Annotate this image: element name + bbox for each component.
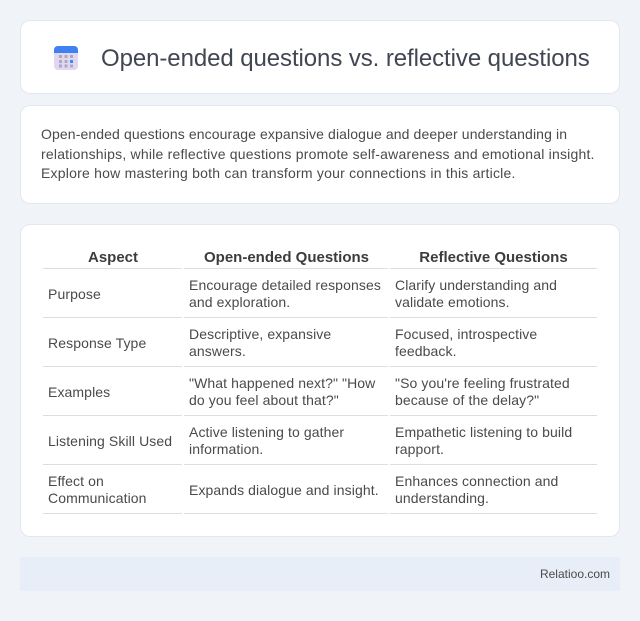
- row: effect on communication: Expands dialogue and insight.: [189, 482, 379, 498]
- row: purpose: Encourage detailed responses: [189, 277, 381, 293]
- intro text: Explore how mastering both can transform your connections in this article.: [41, 165, 516, 181]
- row: effect on communication: understanding.: [395, 490, 489, 506]
- row: response type: Response Type: [48, 335, 146, 351]
- row: listening skill: rapport.: [395, 441, 444, 457]
- row: listening skill: [43, 424, 597, 465]
- row: examples: because of the delay?": [395, 392, 539, 408]
- row: effect on communication: [43, 473, 597, 514]
- row: examples: [43, 375, 597, 416]
- title: Open-ended questions vs. reflective questions: [101, 45, 590, 72]
- header row: Aspect: [88, 249, 138, 266]
- row: response type: answers.: [189, 343, 246, 359]
- icon: calendar: [54, 46, 78, 70]
- row: examples: "So you're feeling frustrated: [395, 375, 570, 391]
- table: [43, 249, 597, 514]
- row: response type: [43, 326, 597, 367]
- row: listening skill: information.: [189, 441, 263, 457]
- intro panel: [20, 105, 620, 204]
- comparison table panel: [20, 224, 620, 537]
- row: purpose: validate emotions.: [395, 294, 510, 310]
- intro text: [41, 126, 595, 181]
- row: response type: feedback.: [395, 343, 457, 359]
- row: response type: Descriptive, expansive: [189, 326, 331, 342]
- row: examples: Examples: [48, 384, 110, 400]
- row: purpose: and exploration.: [189, 294, 290, 310]
- row: effect on communication: Effect on: [48, 473, 104, 489]
- row: examples: do you feel about that?": [189, 392, 339, 408]
- row: purpose: Clarify understanding and: [395, 277, 557, 293]
- row: effect on communication: Enhances connection and: [395, 473, 558, 489]
- row: effect on communication: Communication: [48, 490, 147, 506]
- header panel: [20, 20, 620, 94]
- row: purpose: Purpose: [48, 286, 101, 302]
- footer bar: [20, 557, 620, 591]
- header row: Reflective Questions: [419, 249, 568, 266]
- row: listening skill: Active listening to gather: [189, 424, 344, 440]
- row: listening skill: Listening Skill Used: [48, 433, 172, 449]
- row: listening skill: Empathetic listening to build: [395, 424, 572, 440]
- header row: [43, 249, 597, 269]
- row: response type: Focused, introspective: [395, 326, 537, 342]
- intro text: relationships, while reflective questions promote self-awareness and emotional insight.: [41, 146, 595, 162]
- header row: Open-ended Questions: [204, 249, 369, 266]
- intro text: Open-ended questions encourage expansive dialogue and deeper understanding in: [41, 126, 567, 142]
- row: purpose: [43, 277, 597, 318]
- footer brand: Relatioo.com: [540, 567, 610, 581]
- row: examples: "What happened next?" "How: [189, 375, 375, 391]
